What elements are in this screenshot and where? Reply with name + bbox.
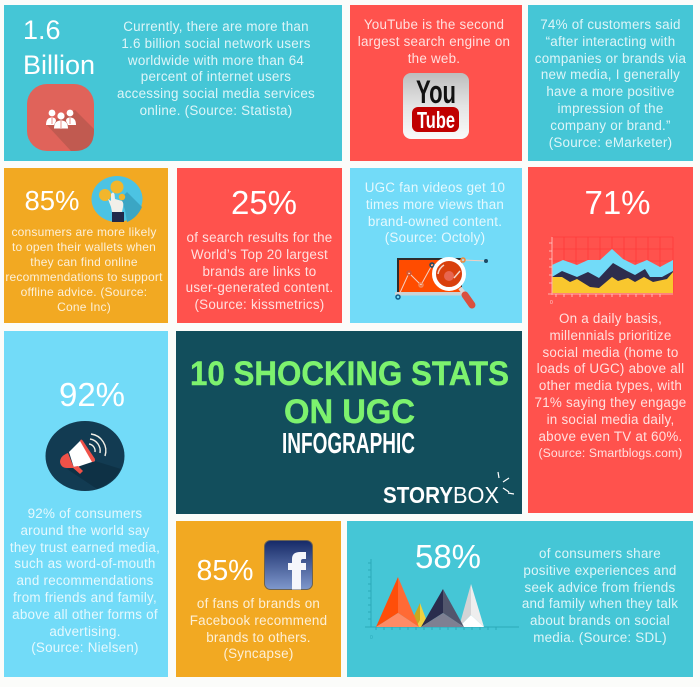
stat: 25%: 25%: [231, 184, 297, 221]
text: social network users: 1.6 billion social network users: [121, 36, 311, 51]
text: wallets: recommendations to support: [5, 270, 163, 284]
title: 10 shocking stats on UGC: [190, 355, 509, 431]
text: 10 times more views: [365, 180, 505, 245]
text: top 20 brands: (Source: kissmetrics): [194, 297, 325, 312]
text: social network users: [117, 19, 315, 118]
text: 74% of customers: (Source: eMarketer): [549, 135, 672, 150]
text: second largest search engine: [358, 17, 510, 66]
text: daily basis: loads of UGC) above all: [537, 361, 684, 376]
stat: 1.6 Billion: 1.6: [23, 15, 61, 45]
text: trust earned media: advertising.: [49, 624, 121, 639]
panel: earned media: [4, 331, 168, 677]
panel: Facebook fans: [176, 521, 341, 677]
text: share experiences: about brands on social: [530, 613, 670, 628]
text: 74% of customers: new media, I generally: [541, 67, 680, 82]
text: recommend brands: (Syncapse): [223, 646, 294, 661]
icon: YouTube logo: You: [416, 74, 456, 110]
text: social network users: online. (Source: Statista): [140, 103, 292, 118]
text: 10 times more views: brand-owned content.: [368, 214, 502, 229]
text: trust earned media: [10, 506, 160, 655]
panel: 1.6 billion users: [4, 5, 342, 161]
text: wallets: they can find online: [30, 255, 138, 269]
text: second largest search engine: YouTube is the second: [364, 17, 504, 32]
text: share experiences: [522, 546, 678, 645]
logo: Storybox: BOX: [453, 482, 499, 508]
stat: 85%: 85%: [24, 185, 80, 216]
panel: positive impression: [528, 5, 693, 161]
text: daily basis: [535, 311, 686, 460]
logo: Storybox: STORY: [383, 482, 453, 508]
text: trust earned media: (Source: Nielsen): [31, 640, 139, 655]
text: top 20 brands: user-generated content.: [186, 280, 333, 295]
text: social network users: accessing social media services: [117, 86, 315, 101]
text: 74% of customers: [535, 17, 686, 150]
text: recommend brands: Facebook recommend: [190, 613, 327, 628]
text: daily basis: 71% saying they engage: [535, 395, 686, 410]
text: trust earned media: and recommendations: [16, 573, 154, 588]
text: share experiences: of consumers share: [539, 546, 661, 561]
icon: Facebook logo: [264, 540, 313, 590]
text: second largest search engine: the web.: [408, 51, 460, 66]
chart: triangle mountains: [365, 559, 519, 641]
panel: consumers share: [347, 521, 693, 677]
text: trust earned media: from friends and family,: [13, 590, 157, 605]
icon: megaphone: [46, 421, 124, 491]
subtitle: infographic: INFOGRAPHIC: [282, 428, 415, 460]
text: daily basis: social media (home to: [542, 345, 679, 360]
text: recommend brands: brands to others.: [206, 630, 311, 645]
title: 10 shocking stats on UGC: ON UGC: [284, 393, 415, 431]
text: recommend brands: of fans of brands on: [197, 596, 320, 611]
text: share experiences: seek advice from friends: [525, 580, 675, 595]
panel: title: [176, 331, 522, 514]
text: wallets: offline advice. (Source:: [21, 285, 147, 299]
text: top 20 brands: [186, 230, 333, 312]
text: social network users: worldwide with more than 64: [128, 53, 304, 68]
text: 74% of customers: have a more positive: [546, 84, 675, 99]
text: daily basis: On a daily basis,: [559, 311, 662, 326]
title: 10 shocking stats on UGC: 10 SHOCKING STATS: [190, 355, 509, 393]
text: wallets: consumers are more likely: [11, 225, 157, 239]
text: 74% of customers: impression of the: [557, 101, 664, 116]
text: share experiences: media. (Source: SDL): [533, 630, 667, 645]
text: 10 times more views: (Source: Octoly): [385, 230, 485, 245]
text: wallets: Cone Inc): [57, 300, 111, 314]
text: 74% of customers: company or brand.”: [550, 118, 671, 133]
panel: search results: [177, 168, 342, 323]
text: second largest search engine: largest search engine on: [358, 34, 510, 49]
stat: 92%: 92%: [59, 376, 125, 413]
text: recommend brands: [190, 596, 327, 661]
text: 74% of customers: “after interacting with: [546, 34, 675, 49]
stat: 71%: 71%: [584, 184, 651, 221]
text: trust earned media: such as word-of-mouth: [14, 556, 156, 571]
text: trust earned media: 92% of consumers: [28, 506, 142, 521]
text: share experiences: and family when they talk: [522, 596, 678, 611]
text: top 20 brands: World’s Top 20 largest: [191, 247, 328, 262]
stat: 1.6 Billion: Billion: [23, 50, 95, 80]
panel: millennials: [528, 167, 693, 513]
text: 10 times more views: times more views than: [366, 197, 504, 212]
text: 74% of customers: companies or brands via: [535, 51, 686, 66]
text: trust earned media: they trust earned media,: [10, 540, 160, 555]
stat: 58%: 58%: [415, 538, 481, 575]
stat: 1.6 Billion: [23, 15, 95, 80]
text: social network users: percent of internet users: [141, 69, 291, 84]
panel: online recommendations: [4, 168, 168, 323]
icon: people: [27, 84, 94, 151]
icon: YouTube logo: [403, 73, 469, 139]
icon: laptop and magnifier: [395, 257, 488, 308]
text: social network users: Currently, there are more than: [123, 19, 309, 34]
text: top 20 brands: of search results for the: [187, 230, 332, 245]
chart: area chart: [548, 236, 674, 306]
text: daily basis: millennials prioritize: [549, 328, 672, 343]
text: share experiences: positive experiences and: [523, 563, 677, 578]
text: top 20 brands: brands are links to: [202, 264, 316, 279]
logo: Storybox: [383, 472, 514, 508]
stat: 85%: 85%: [196, 555, 254, 587]
text: 74% of customers: 74% of customers said: [540, 17, 681, 32]
panel: YouTube: [350, 5, 522, 161]
text: trust earned media: above all other forms of: [12, 607, 158, 622]
text: wallets: to open their wallets when: [12, 240, 156, 254]
icon: hand and coins: [92, 176, 142, 222]
text: daily basis: in social media daily,: [547, 412, 674, 427]
text: 10 times more views: UGC fan videos get 10: [365, 180, 505, 195]
chart: triangle mountains: 0: [370, 635, 373, 641]
text: trust earned media: around the world say: [20, 523, 150, 538]
text: daily basis: other media types, with: [539, 378, 682, 393]
icon: YouTube logo: Tube: [417, 107, 455, 133]
chart: area chart: 0: [550, 300, 553, 306]
text: daily basis: (Source: Smartblogs.com): [539, 446, 682, 460]
panel: fan videos: [350, 168, 522, 323]
text: wallets: [5, 225, 163, 314]
text: daily basis: above even TV at 60%.: [538, 429, 682, 444]
